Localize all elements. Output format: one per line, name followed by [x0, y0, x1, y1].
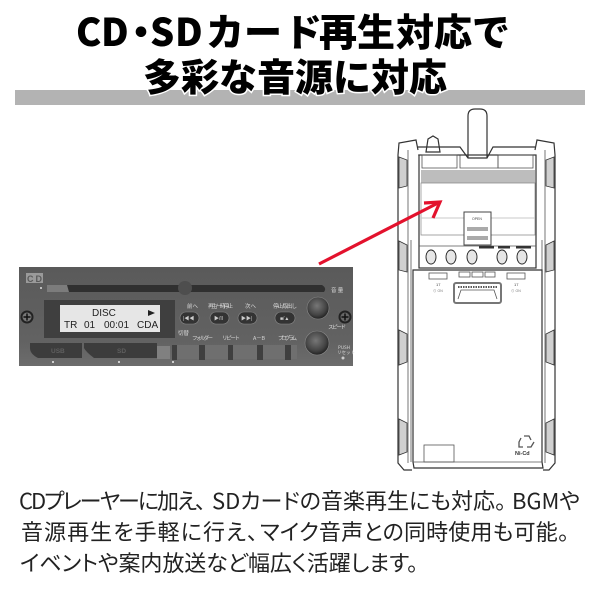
function buttons: リピート [222, 334, 240, 342]
display [44, 300, 175, 338]
body text: BGMや [512, 484, 580, 516]
top compartment [419, 155, 536, 268]
device: CD/SD player panel [19, 267, 355, 366]
function buttons [172, 329, 297, 360]
handle [454, 283, 501, 303]
disc slot [47, 281, 325, 295]
transport buttons: 次へ [245, 302, 257, 310]
antenna [468, 109, 487, 158]
knob: volume: 音 量 [331, 286, 344, 294]
knob: speed: PUSH [338, 345, 350, 351]
title: 多彩な音源に対応 [143, 47, 447, 102]
display: 01 [84, 320, 96, 331]
display: DISC [92, 308, 116, 319]
body text: マイク音声との同時使用も可能。 [260, 515, 569, 547]
body text: 音源再生を手軽に行え、 [21, 515, 258, 547]
body text: SDカードの音楽再生にも対応。 [212, 484, 506, 516]
screw: left [20, 310, 34, 324]
icon: CD logo: CD [27, 274, 42, 284]
latch: OPEN [472, 217, 482, 221]
transport buttons: |◀◀ [183, 316, 194, 322]
knob row [426, 250, 527, 264]
knob: speed: スピード [328, 323, 346, 331]
function buttons: フォルダー [192, 334, 213, 342]
title [76, 2, 510, 102]
function buttons: A－B [253, 334, 265, 342]
display: CDA [137, 320, 158, 331]
battery label [424, 445, 454, 462]
transport buttons: 停止/取出し [273, 302, 297, 310]
device: PA amplifier outline: ⊙ ON [511, 289, 521, 293]
knob: speed: リセット [337, 350, 355, 356]
device: PA amplifier outline: ⊙ ON [433, 289, 443, 293]
body text [19, 484, 580, 578]
transport buttons: 再生/一時停止 [208, 302, 233, 310]
display: TR [64, 320, 77, 331]
body top edge [418, 147, 535, 158]
function buttons: 切替 [178, 329, 190, 337]
latch [464, 212, 491, 245]
device: PA amplifier outline: 17 [436, 282, 441, 287]
transport buttons: ■/▲ [280, 316, 289, 322]
function buttons: プログラム [278, 334, 297, 342]
USB and SD slots [30, 343, 174, 363]
lower body [413, 270, 543, 468]
display: 00:01 [104, 320, 129, 331]
device: PA amplifier outline [398, 109, 555, 470]
icon: recycling [515, 436, 534, 457]
transport buttons [180, 302, 297, 324]
grey heading bar [15, 90, 585, 105]
knob: volume [307, 286, 344, 319]
icon: recycling: Ni-Cd [515, 451, 530, 457]
side clips [399, 157, 554, 455]
body text: イベントや案内放送など幅広く活躍します。 [20, 546, 418, 578]
body outer right [535, 140, 555, 470]
USB and SD slots: SD [117, 348, 126, 355]
title: CD・SDカード再生対応で [76, 2, 510, 57]
arrow: red pointer [319, 202, 440, 264]
icon: CD logo [26, 273, 43, 289]
knob: top [426, 136, 440, 152]
transport buttons: ▶▶| [241, 316, 252, 322]
screw: right [338, 310, 352, 324]
USB and SD slots: USB [51, 348, 65, 355]
transport buttons: 前へ [187, 302, 199, 310]
knob: speed [305, 323, 355, 360]
body text: CDプレーヤーに加え、 [19, 484, 206, 516]
device: PA amplifier outline: 17 [514, 282, 519, 287]
body outer left [398, 140, 418, 470]
transport buttons: ▶/II [214, 316, 223, 322]
